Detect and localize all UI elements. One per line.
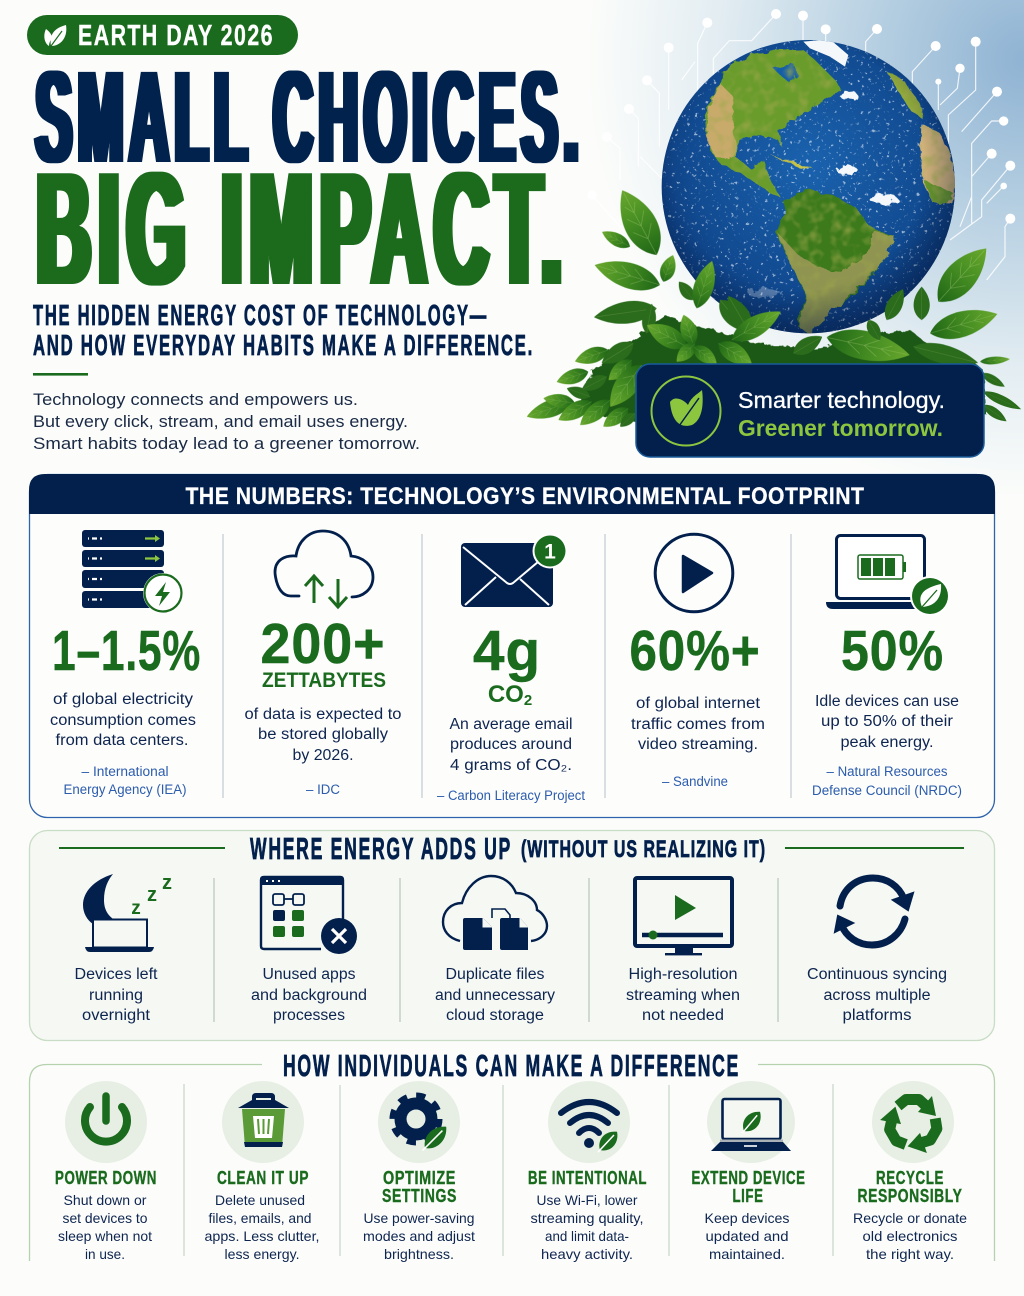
subtitle	[33, 300, 534, 362]
panel header	[29, 474, 995, 514]
tip: recycle responsibly: Recycle or donate	[853, 1210, 967, 1226]
stat: video streaming: 60%+	[630, 619, 760, 683]
tip: recycle responsibly: RECYCLE	[876, 1167, 944, 1188]
item: continuous syncing	[807, 878, 947, 1024]
panel: how individuals can make a difference	[30, 1048, 994, 1262]
stat: email CO2	[437, 534, 585, 803]
panel: where energy adds up	[30, 830, 994, 1040]
subtitle: THE HIDDEN ENERGY COST OF TECHNOLOGY—	[33, 300, 488, 332]
stat: idle devices	[812, 536, 962, 798]
stat: zettabytes	[244, 531, 402, 797]
stat: video streaming: video streaming.	[638, 736, 758, 753]
stat: zettabytes: be stored globally	[258, 726, 388, 743]
icon: power button	[65, 1081, 147, 1163]
callout: smarter technology: Smarter technology.	[738, 387, 945, 413]
stat: data centers: Energy Agency (IEA)	[64, 782, 186, 797]
polar ice	[803, 39, 848, 67]
cloud speckle	[662, 40, 955, 334]
icon: cloud with documents	[443, 876, 547, 950]
stat: email CO2: produces around	[450, 736, 572, 753]
stat: zettabytes: by 2026.	[292, 747, 354, 764]
intro text: But every click, stream, and email uses energy.	[33, 412, 408, 431]
tip: power down: set devices to	[62, 1210, 148, 1226]
stat: idle devices: 50%	[841, 619, 944, 683]
continents	[704, 50, 957, 333]
icon: app window	[260, 876, 357, 954]
tip: optimize settings: Use power-saving	[364, 1210, 474, 1226]
stat: data centers: – International	[82, 764, 168, 779]
item: devices overnight: overnight	[82, 1007, 151, 1024]
icon: monitor with play	[635, 878, 732, 955]
tip: power down	[55, 1081, 157, 1262]
item: unused apps	[251, 876, 367, 1024]
title	[36, 43, 584, 319]
tip: extend device life: updated and	[706, 1228, 788, 1244]
stat: email CO2: An average email	[450, 716, 572, 733]
stat: video streaming: traffic comes from	[631, 716, 765, 733]
icon: sync arrows	[835, 878, 913, 945]
item: duplicate files: Duplicate files	[446, 966, 545, 983]
icon: sleeping laptop	[83, 872, 172, 952]
stat: zettabytes: 200+	[260, 612, 386, 676]
stat: zettabytes: – IDC	[306, 782, 340, 797]
stat: idle devices: – Natural Resources	[826, 764, 948, 779]
item: high-resolution streaming: not needed	[642, 1007, 724, 1024]
tip: be intentional: Use Wi-Fi, lower	[536, 1192, 638, 1208]
tip: clean it up: less energy.	[224, 1246, 300, 1262]
subtitle: AND HOW EVERYDAY HABITS MAKE A DIFFERENCE.	[33, 330, 534, 362]
circuit nodes	[587, 9, 1015, 224]
item: devices overnight	[74, 872, 172, 1024]
tip: optimize settings: modes and adjust	[363, 1228, 475, 1244]
tip: extend device life: EXTEND DEVICE	[692, 1167, 806, 1188]
stat: idle devices: Idle devices can use	[815, 693, 959, 710]
globe	[662, 40, 955, 334]
accent rule	[33, 373, 88, 376]
tip: recycle responsibly: the right way.	[866, 1246, 954, 1262]
tip: clean it up	[204, 1081, 320, 1262]
item: high-resolution streaming: High-resolution	[628, 966, 738, 983]
tip: power down: in use.	[85, 1246, 125, 1262]
stat: zettabytes: of data is expected to	[244, 706, 402, 723]
tip: be intentional: BE INTENTIONAL	[528, 1167, 647, 1188]
tip: recycle responsibly: old electronics	[862, 1228, 958, 1244]
tip: clean it up: Delete unused	[215, 1192, 305, 1208]
item: duplicate files: cloud storage	[446, 1007, 544, 1024]
section heading: WHERE ENERGY ADDS UP	[250, 831, 512, 866]
intro text: Smart habits today lead to a greener tomorrow.	[33, 434, 420, 453]
foliage dark base	[578, 317, 985, 422]
tip: power down: Shut down or	[64, 1192, 147, 1208]
icon: recycling symbol	[872, 1081, 954, 1163]
item: continuous syncing: across multiple	[824, 987, 930, 1004]
stat: idle devices: peak energy.	[840, 734, 934, 751]
callout: smarter technology: Greener tomorrow.	[738, 415, 943, 441]
stat: idle devices: up to 50% of their	[821, 713, 953, 730]
stat: data centers: consumption comes	[50, 712, 196, 729]
item: devices overnight: running	[89, 987, 143, 1004]
item: devices overnight: Devices left	[74, 966, 158, 983]
tip: be intentional: and limit data-	[545, 1228, 629, 1244]
tip: be intentional: streaming quality,	[530, 1210, 644, 1226]
panel: the numbers	[29, 474, 995, 818]
item: unused apps: Unused apps	[262, 966, 356, 983]
item: unused apps: and background	[251, 987, 367, 1004]
badge: Earth Day 2026: EARTH DAY 2026	[78, 20, 274, 52]
icon: envelope with badge	[461, 534, 568, 607]
sky glow behind globe	[520, 0, 1024, 510]
tip: recycle responsibly: RESPONSIBLY	[858, 1185, 962, 1206]
icon: cloud with arrows	[275, 531, 373, 607]
callout: smarter technology	[636, 364, 984, 457]
icon: gear and leaf	[378, 1081, 460, 1163]
stat: data centers: 1–1.5%	[52, 619, 201, 683]
tip: optimize settings	[363, 1081, 475, 1262]
stat: video streaming: of global internet	[636, 695, 761, 712]
icon: wifi and leaf	[548, 1081, 630, 1163]
tip: clean it up: apps. Less clutter,	[204, 1228, 320, 1244]
stat: idle devices: Defense Council (NRDC)	[812, 783, 962, 798]
section heading: (WITHOUT US REALIZING IT)	[521, 836, 766, 863]
stat: data centers: from data centers.	[56, 732, 188, 749]
foliage lower right	[980, 355, 1010, 365]
tip: extend device life: LIFE	[732, 1185, 764, 1206]
icon: server rack	[82, 530, 183, 613]
foliage	[524, 183, 1023, 432]
icon: envelope with badge: 1	[544, 540, 556, 564]
item: unused apps: processes	[273, 1007, 345, 1024]
tip: extend device life: Keep devices	[704, 1210, 790, 1226]
badge: Earth Day 2026	[27, 15, 298, 55]
stat: email CO2: 4g	[473, 619, 541, 683]
foliage lower left	[524, 394, 574, 425]
stat: email CO2: – Carbon Literacy Project	[437, 788, 585, 803]
panel header: THE NUMBERS: TECHNOLOGY’S ENVIRONMENTAL FOOTPRINT	[186, 483, 864, 510]
item: duplicate files	[435, 876, 555, 1024]
stat: zettabytes: ZETTABYTES	[262, 669, 386, 692]
tip: power down: sleep when not	[58, 1228, 152, 1244]
item: continuous syncing: Continuous syncing	[807, 966, 947, 983]
tip: extend device life	[692, 1081, 806, 1262]
icon: leaf in ring	[652, 376, 720, 446]
intro text	[33, 390, 420, 453]
stat: email CO2: 4 grams of CO₂.	[450, 757, 572, 774]
stat: data centers: of global electricity	[53, 691, 193, 708]
tip: optimize settings: SETTINGS	[382, 1185, 457, 1206]
intro text: Technology connects and empowers us.	[33, 390, 358, 409]
stat: email CO2: CO	[488, 681, 524, 708]
hero illustration: globe, circuits and foliage	[524, 9, 1023, 432]
stat: video streaming: – Sandvine	[662, 774, 728, 789]
tip: be intentional	[528, 1081, 647, 1262]
icon: sleeping laptop: z	[162, 872, 172, 894]
stat: video streaming	[630, 534, 765, 789]
tip: extend device life: maintained.	[709, 1246, 785, 1262]
tip: clean it up: CLEAN IT UP	[217, 1167, 309, 1188]
item: duplicate files: and unnecessary	[435, 987, 555, 1004]
icon: trash can	[222, 1081, 304, 1163]
icon: play button	[655, 534, 733, 612]
tip: recycle responsibly	[853, 1081, 967, 1262]
item: high-resolution streaming	[626, 878, 740, 1024]
item: continuous syncing: platforms	[842, 1007, 912, 1024]
icon: laptop with leaf	[707, 1081, 795, 1163]
item: high-resolution streaming: streaming when	[626, 987, 740, 1004]
stat: data centers	[50, 530, 201, 797]
clouds	[748, 90, 897, 297]
tip: optimize settings: OPTIMIZE	[383, 1167, 456, 1188]
icon: laptop with battery	[826, 536, 950, 616]
stat: email CO2: 2	[524, 692, 532, 709]
icon: sleeping laptop: z	[147, 884, 157, 906]
icon: sleeping laptop: z	[131, 898, 141, 919]
tip: be intentional: heavy activity.	[541, 1246, 633, 1262]
tip: power down: POWER DOWN	[55, 1167, 157, 1188]
icon: white leaf	[44, 25, 66, 46]
tip: clean it up: files, emails, and	[208, 1210, 312, 1226]
circuit lines	[592, 14, 1010, 280]
tip: optimize settings: brightness.	[384, 1246, 454, 1262]
